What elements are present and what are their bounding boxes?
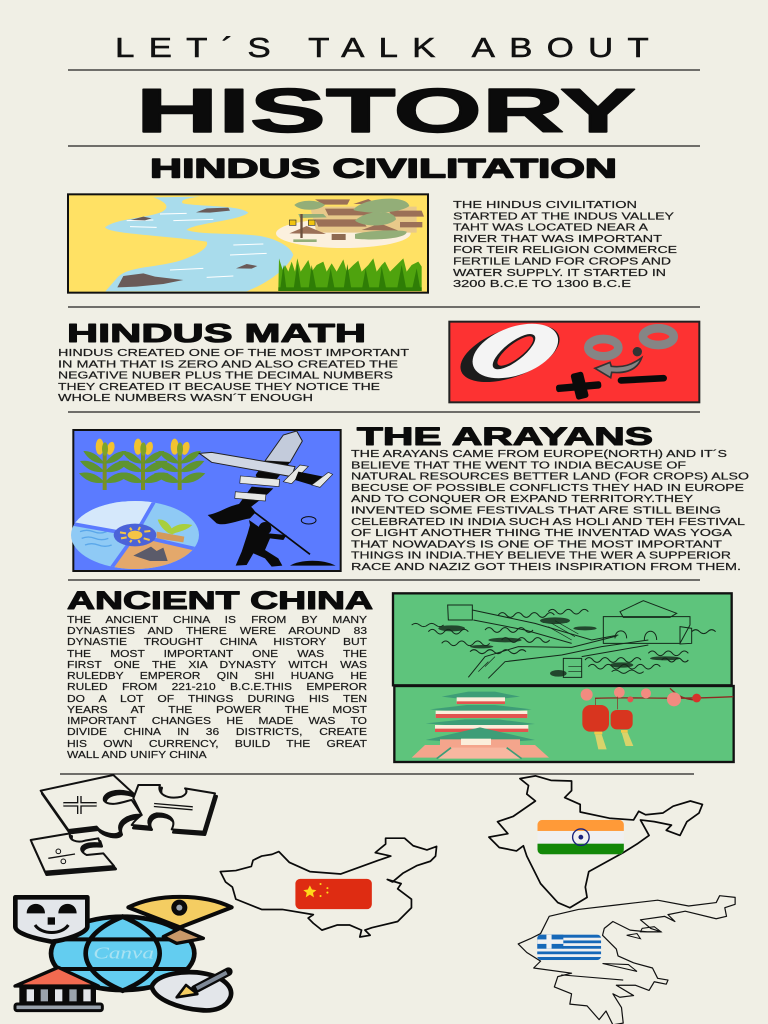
icon: crossed swords bbox=[199, 431, 333, 512]
icon: mask bbox=[15, 897, 87, 942]
icon: india flag bbox=[537, 820, 624, 854]
text block: hindus civilitation: FERTILE LAND FOR CROPS AND bbox=[453, 256, 671, 268]
icon: crops bbox=[79, 439, 205, 490]
icon: china flag bbox=[295, 879, 372, 909]
text block: ancient china: DYNASTIE TROUGHT CHINA HISTORY BUT bbox=[67, 637, 367, 648]
text block: hindus civilitation: WATER SUPPLY. IT STARTED IN bbox=[453, 268, 666, 279]
text block: ancient china: RULED FROM 221-210 B.C.E.THIS EMPEROR bbox=[67, 682, 367, 693]
icon: mouse and pen bbox=[152, 972, 231, 1010]
icon: sectioned earth wheel bbox=[71, 501, 199, 569]
text block: hindus math: NEGATIVE NUBER PLUS THE DECIMAL NUMBERS bbox=[58, 371, 393, 382]
icon: plus sign bbox=[556, 371, 602, 400]
text block: hindus math bbox=[58, 348, 409, 404]
map: india with flag bbox=[489, 776, 702, 908]
icon: temple bbox=[15, 967, 102, 1011]
text block: hindus civilitation bbox=[453, 200, 677, 290]
icon: zero bbox=[453, 313, 567, 394]
text block: ancient china: HIS OWN CURRENCY, BUILD THE GREAT bbox=[67, 739, 367, 750]
text block: ancient china: DYNASTIES AND THERE WERE AROUND 83 bbox=[67, 626, 367, 637]
text block: the arayans: BECUSE OF POSSIBLE CONFLICTS THEY HAD IN EUROPE bbox=[351, 483, 744, 494]
icon: pagoda bbox=[412, 692, 549, 759]
text block: the arayans: THE ARAYANS CAME FROM EUROPE(NORTH) AND IT´S bbox=[351, 448, 727, 460]
icon: globe bbox=[51, 917, 194, 991]
text block: hindus civilitation: TAHT WAS LOCATED NEAR A bbox=[453, 223, 648, 234]
icon: culture globe, mask, fan, temple, mouse bbox=[15, 897, 232, 1011]
text block: hindus math: THEY CREATED IT BECAUSE THEY NOTICE THE bbox=[58, 382, 380, 393]
text block: ancient china: YEARS AT THE POWER THE MOST bbox=[67, 705, 367, 716]
text block: the arayans bbox=[351, 448, 749, 573]
text block: the arayans: INVENTED SOME FESTIVALS THAT ARE STILL BEING bbox=[351, 506, 721, 516]
icon: minus sign bbox=[618, 375, 667, 384]
panel: indus valley illustration bbox=[68, 194, 428, 293]
text block: the arayans: THAT NOWADAYS IS ONE OF THE MOST IMPORTANT bbox=[351, 539, 722, 550]
text block: hindus civilitation: 3200 B.C.E TO 1300 B.C.E bbox=[453, 279, 631, 290]
icon: grass bbox=[278, 258, 422, 291]
text block: the arayans: AND TO CONQUER OR EXPAND TERRITORY.THEY bbox=[351, 494, 693, 505]
panel: pagoda and lanterns illustration bbox=[394, 686, 734, 762]
heading: hindus civilitation: HINDUS CIVILITATION bbox=[150, 154, 617, 184]
text block: the arayans: BELIEVE THAT THE WENT TO INDIA BECAUSE OF bbox=[351, 460, 686, 471]
text block: hindus civilitation: STARTED AT THE INDUS VALLEY bbox=[453, 211, 674, 222]
title: history: HISTORY bbox=[136, 77, 636, 146]
text block: ancient china: DIVIDE CHINA IN 36 DISTRICTS, CREATE bbox=[67, 727, 367, 738]
panel: great wall illustration bbox=[393, 593, 732, 685]
text block: ancient china: THE ANCIENT CHINA IS FROM BY MANY bbox=[67, 615, 367, 626]
icon: math puzzle pieces bbox=[31, 775, 217, 875]
icon: village bbox=[276, 199, 424, 248]
text block: hindus math: WHOLE NUMBERS WASN´T ENOUGH bbox=[58, 392, 313, 404]
icon: river bbox=[105, 197, 293, 291]
text block: the arayans: NATURAL RESOURCES BETTER LAND (FOR CROPS) ALSO bbox=[351, 472, 749, 483]
text block: the arayans: OF LIGHT ANOTHER THING THE INVENTAD WAS YOGA bbox=[351, 528, 732, 539]
icon: figure with flag bbox=[208, 503, 336, 567]
icon: lanterns and blossom branch bbox=[581, 687, 733, 749]
title: let's talk about: LET´S TALK ABOUT bbox=[115, 31, 649, 63]
text block: ancient china bbox=[66, 615, 367, 761]
text block: hindus math: IN MATH THAT IS ZERO AND ALSO CREATED THE bbox=[58, 359, 398, 370]
icon: small zeros and arrow bbox=[588, 328, 674, 378]
panel: arayans illustration bbox=[68, 430, 341, 572]
heading: ancient china: ANCIENT CHINA bbox=[67, 587, 373, 615]
text block: ancient china: DO A LOT OF THINGS DURING HIS TEN bbox=[67, 694, 367, 705]
text block: ancient china: IMPORTANT CHANGES HE MADE WAS TO bbox=[67, 716, 367, 727]
text block: hindus civilitation: RIVER THAT WAS IMPORTANT bbox=[453, 234, 662, 245]
text block: hindus civilitation: FOR TEIR RELIGION COMMERCE bbox=[453, 245, 677, 256]
panel: math symbols illustration bbox=[449, 313, 699, 402]
text block: the arayans: CELEBRATED IN INDIA SUCH AS HOLI AND TEH FESTIVAL bbox=[351, 517, 746, 528]
icon: globe: Canva bbox=[93, 944, 154, 963]
map: greece with flag bbox=[518, 896, 735, 1024]
text block: ancient china: WALL AND UNIFY CHINA bbox=[67, 750, 207, 761]
heading: hindus math: HINDUS MATH bbox=[67, 318, 366, 348]
text block: the arayans: RACE AND NAZIZ GOT THEIS INSPIRATION FROM THEM. bbox=[351, 562, 741, 573]
text block: ancient china: FIRST ONE THE XIA DYNASTY WITCH WAS bbox=[67, 660, 367, 671]
icon: fan bbox=[128, 897, 232, 943]
text block: hindus civilitation: THE HINDUS CIVILITATION bbox=[453, 200, 637, 211]
text block: hindus math: HINDUS CREATED ONE OF THE MOST IMPORTANT bbox=[58, 348, 409, 359]
text block: ancient china: RULEDBY EMPEROR QIN SHI HUANG HE bbox=[67, 671, 367, 682]
map: china with flag bbox=[220, 838, 437, 937]
icon: greece flag bbox=[537, 935, 601, 960]
icon: great wall sketch bbox=[412, 601, 716, 678]
heading: the arayans: THE ARAYANS bbox=[357, 423, 653, 451]
text block: ancient china: THE MOST IMPORTANT ONE WAS THE bbox=[67, 649, 367, 660]
text block: the arayans: THINGS IN INDIA.THEY BELIEVE THE WER A SUPPERIOR bbox=[351, 551, 731, 562]
